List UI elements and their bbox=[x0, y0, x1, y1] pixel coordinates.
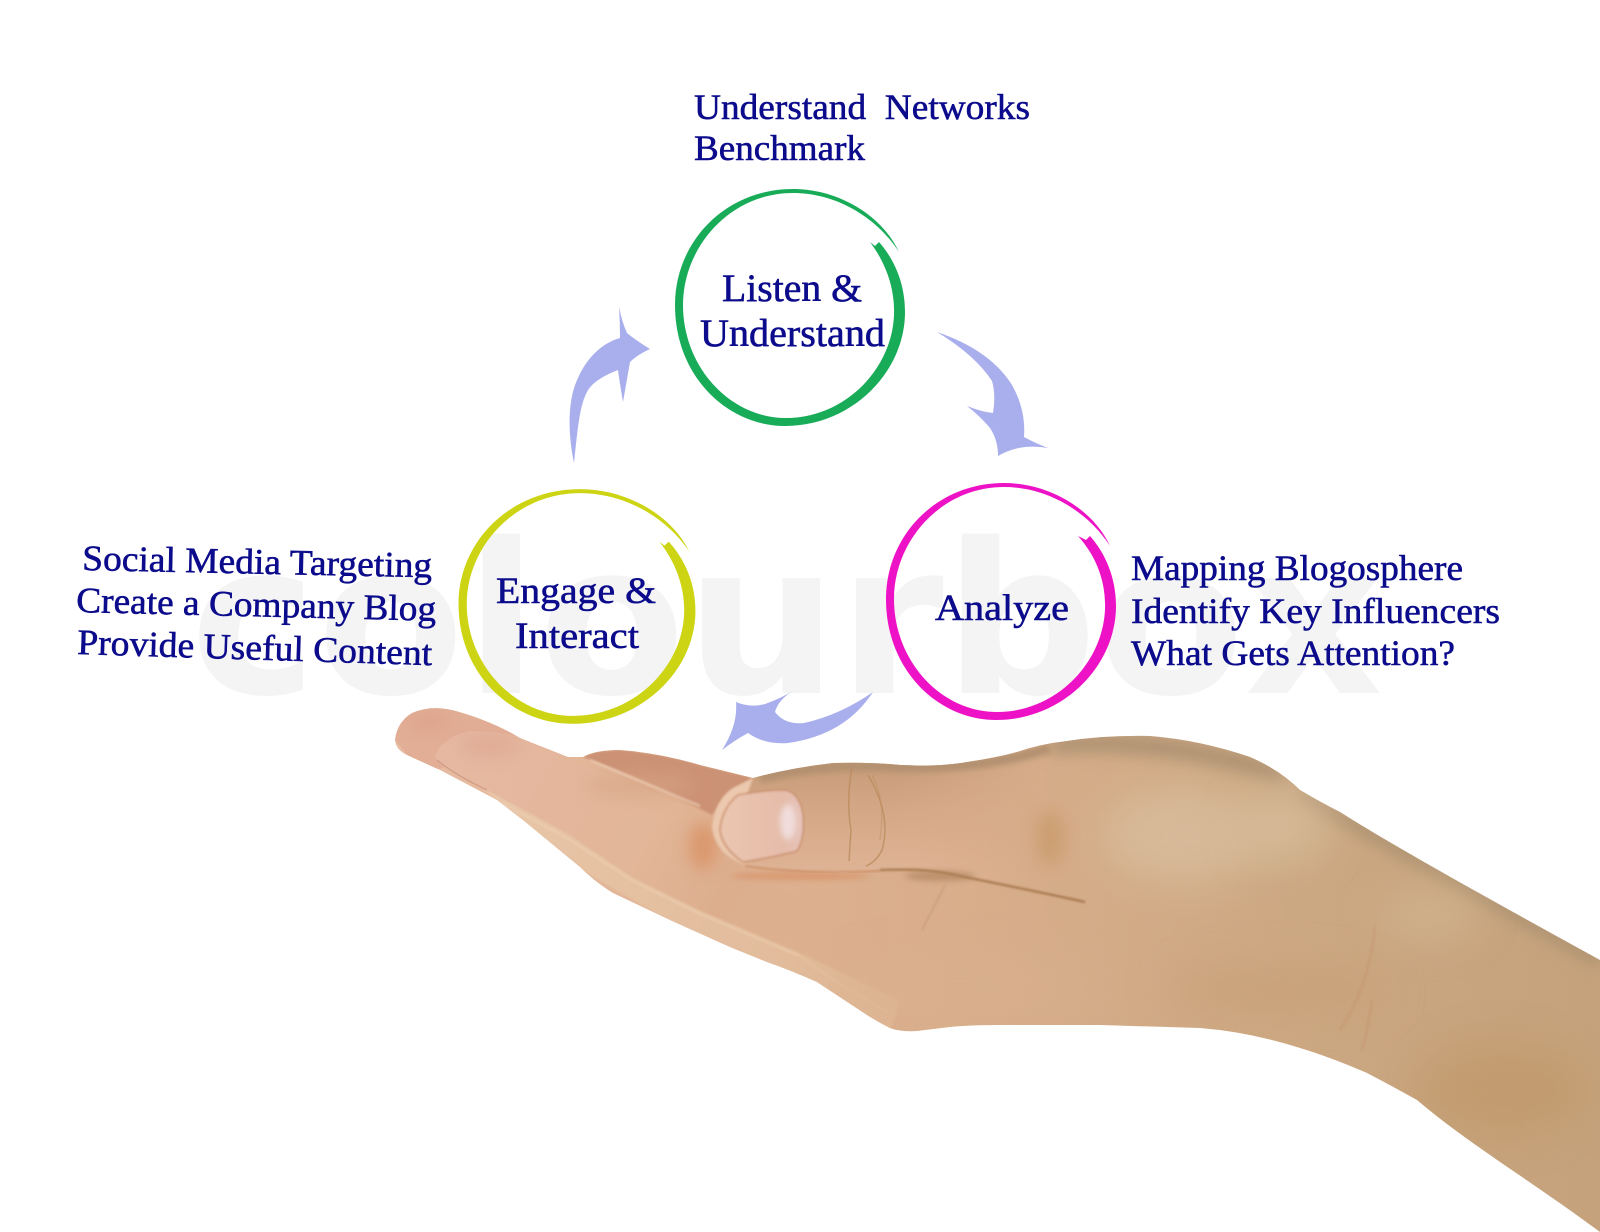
text block: right list bbox=[1131, 548, 1500, 673]
text block: top list: Understand Networks bbox=[694, 87, 1030, 127]
wrist creases bbox=[1340, 925, 1375, 1050]
watermark: colourbox bbox=[190, 498, 1383, 743]
text block: left list: Provide Useful Content bbox=[77, 622, 433, 673]
orange shadow by thumb bbox=[689, 822, 717, 870]
text block: left list: Create a Company Blog bbox=[76, 580, 437, 629]
thumb tip rim bbox=[712, 778, 753, 864]
arrow: analyze to engage bbox=[722, 690, 873, 750]
text block: top list: Benchmark bbox=[694, 128, 865, 168]
skin shading bbox=[1050, 743, 1285, 776]
hand photo illustration bbox=[380, 690, 1600, 1232]
text block: right list: What Gets Attention? bbox=[1131, 633, 1455, 673]
circle node: Engage & Interact: Engage & bbox=[496, 571, 656, 612]
thumb lower edge bbox=[745, 866, 880, 872]
back finger bbox=[395, 708, 520, 770]
thumb bbox=[715, 758, 992, 873]
circle node: Listen & Understand bbox=[675, 189, 905, 426]
circle node: Analyze bbox=[886, 483, 1116, 720]
arrow: engage to listen bbox=[570, 307, 650, 463]
circle node: Engage & Interact: Interact bbox=[515, 616, 640, 657]
thumb nail bbox=[720, 790, 803, 862]
circle node: Listen & Understand: Understand bbox=[700, 312, 886, 355]
circle node: Analyze: Analyze bbox=[935, 588, 1069, 629]
webbing crease bbox=[880, 870, 1085, 902]
text block: right list: Mapping Blogosphere bbox=[1131, 548, 1463, 588]
lower fingers bbox=[480, 785, 900, 1032]
circle node: Listen & Understand: Listen & bbox=[722, 267, 862, 310]
finger tip shading bbox=[471, 738, 509, 752]
front finger bbox=[435, 731, 722, 920]
ring finger bbox=[583, 750, 753, 815]
text block: left list: Social Media Targeting bbox=[82, 538, 433, 585]
text block: right list: Identify Key Influencers bbox=[1131, 591, 1500, 631]
thumb knuckle creases bbox=[849, 768, 885, 866]
text block: top list bbox=[694, 87, 1030, 168]
arrow: listen to analyze bbox=[937, 332, 1048, 456]
circle node: Engage & Interact bbox=[459, 489, 695, 724]
text block: left list bbox=[76, 538, 437, 673]
